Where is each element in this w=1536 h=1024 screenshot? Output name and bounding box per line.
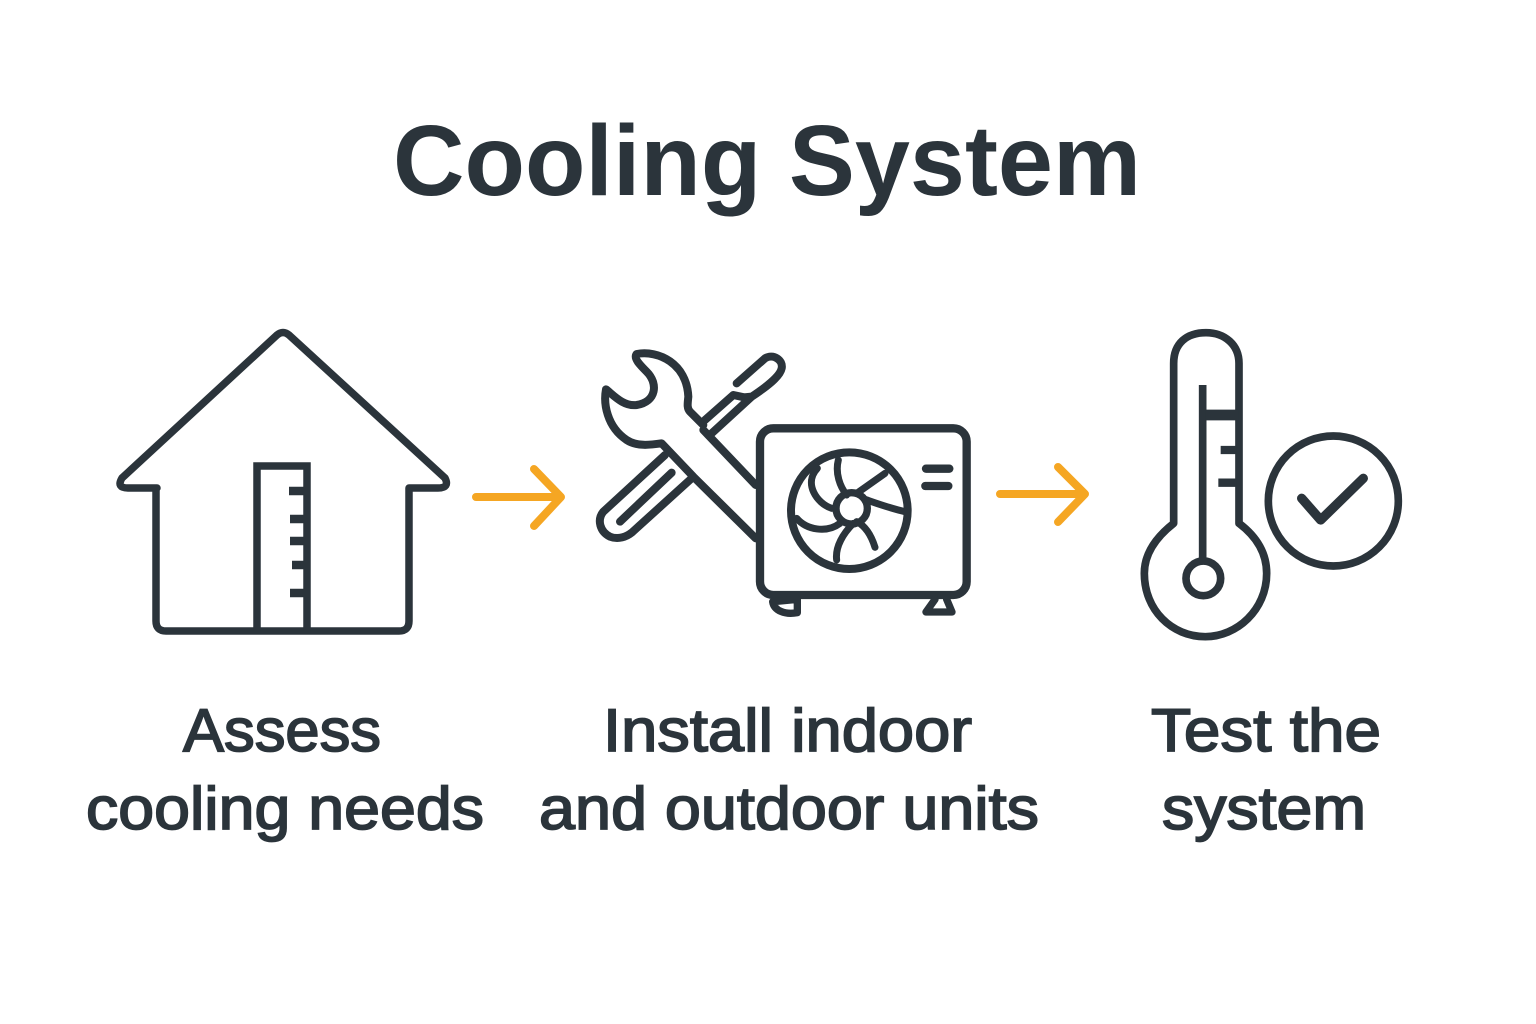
label: assess: cooling needs: [86, 775, 484, 842]
label: assess: Assess: [183, 697, 381, 764]
label: test: Test the: [1151, 697, 1381, 764]
thermometer: [1144, 333, 1267, 637]
wrench: [605, 353, 756, 538]
label: test: [1151, 697, 1381, 842]
label: assess: [86, 697, 484, 842]
arrow: install to test: [1000, 467, 1085, 522]
check badge: [1268, 436, 1398, 566]
vents: [925, 469, 949, 486]
label: install: [539, 697, 1039, 842]
outdoor unit casing: [760, 428, 967, 595]
title: Cooling System: [393, 105, 1141, 217]
icon: wrench, screwdriver and outdoor unit: [600, 353, 967, 613]
screwdriver: [600, 357, 782, 538]
icon: thermometer and check badge: [1144, 333, 1398, 637]
icon: house with ruler: [120, 332, 446, 631]
label: install: Install indoor: [603, 697, 972, 764]
arrow: assess to install: [476, 469, 561, 526]
label: install: and outdoor units: [539, 775, 1039, 842]
fan: [791, 452, 908, 569]
label: test: system: [1162, 775, 1366, 842]
feet: [773, 599, 952, 613]
